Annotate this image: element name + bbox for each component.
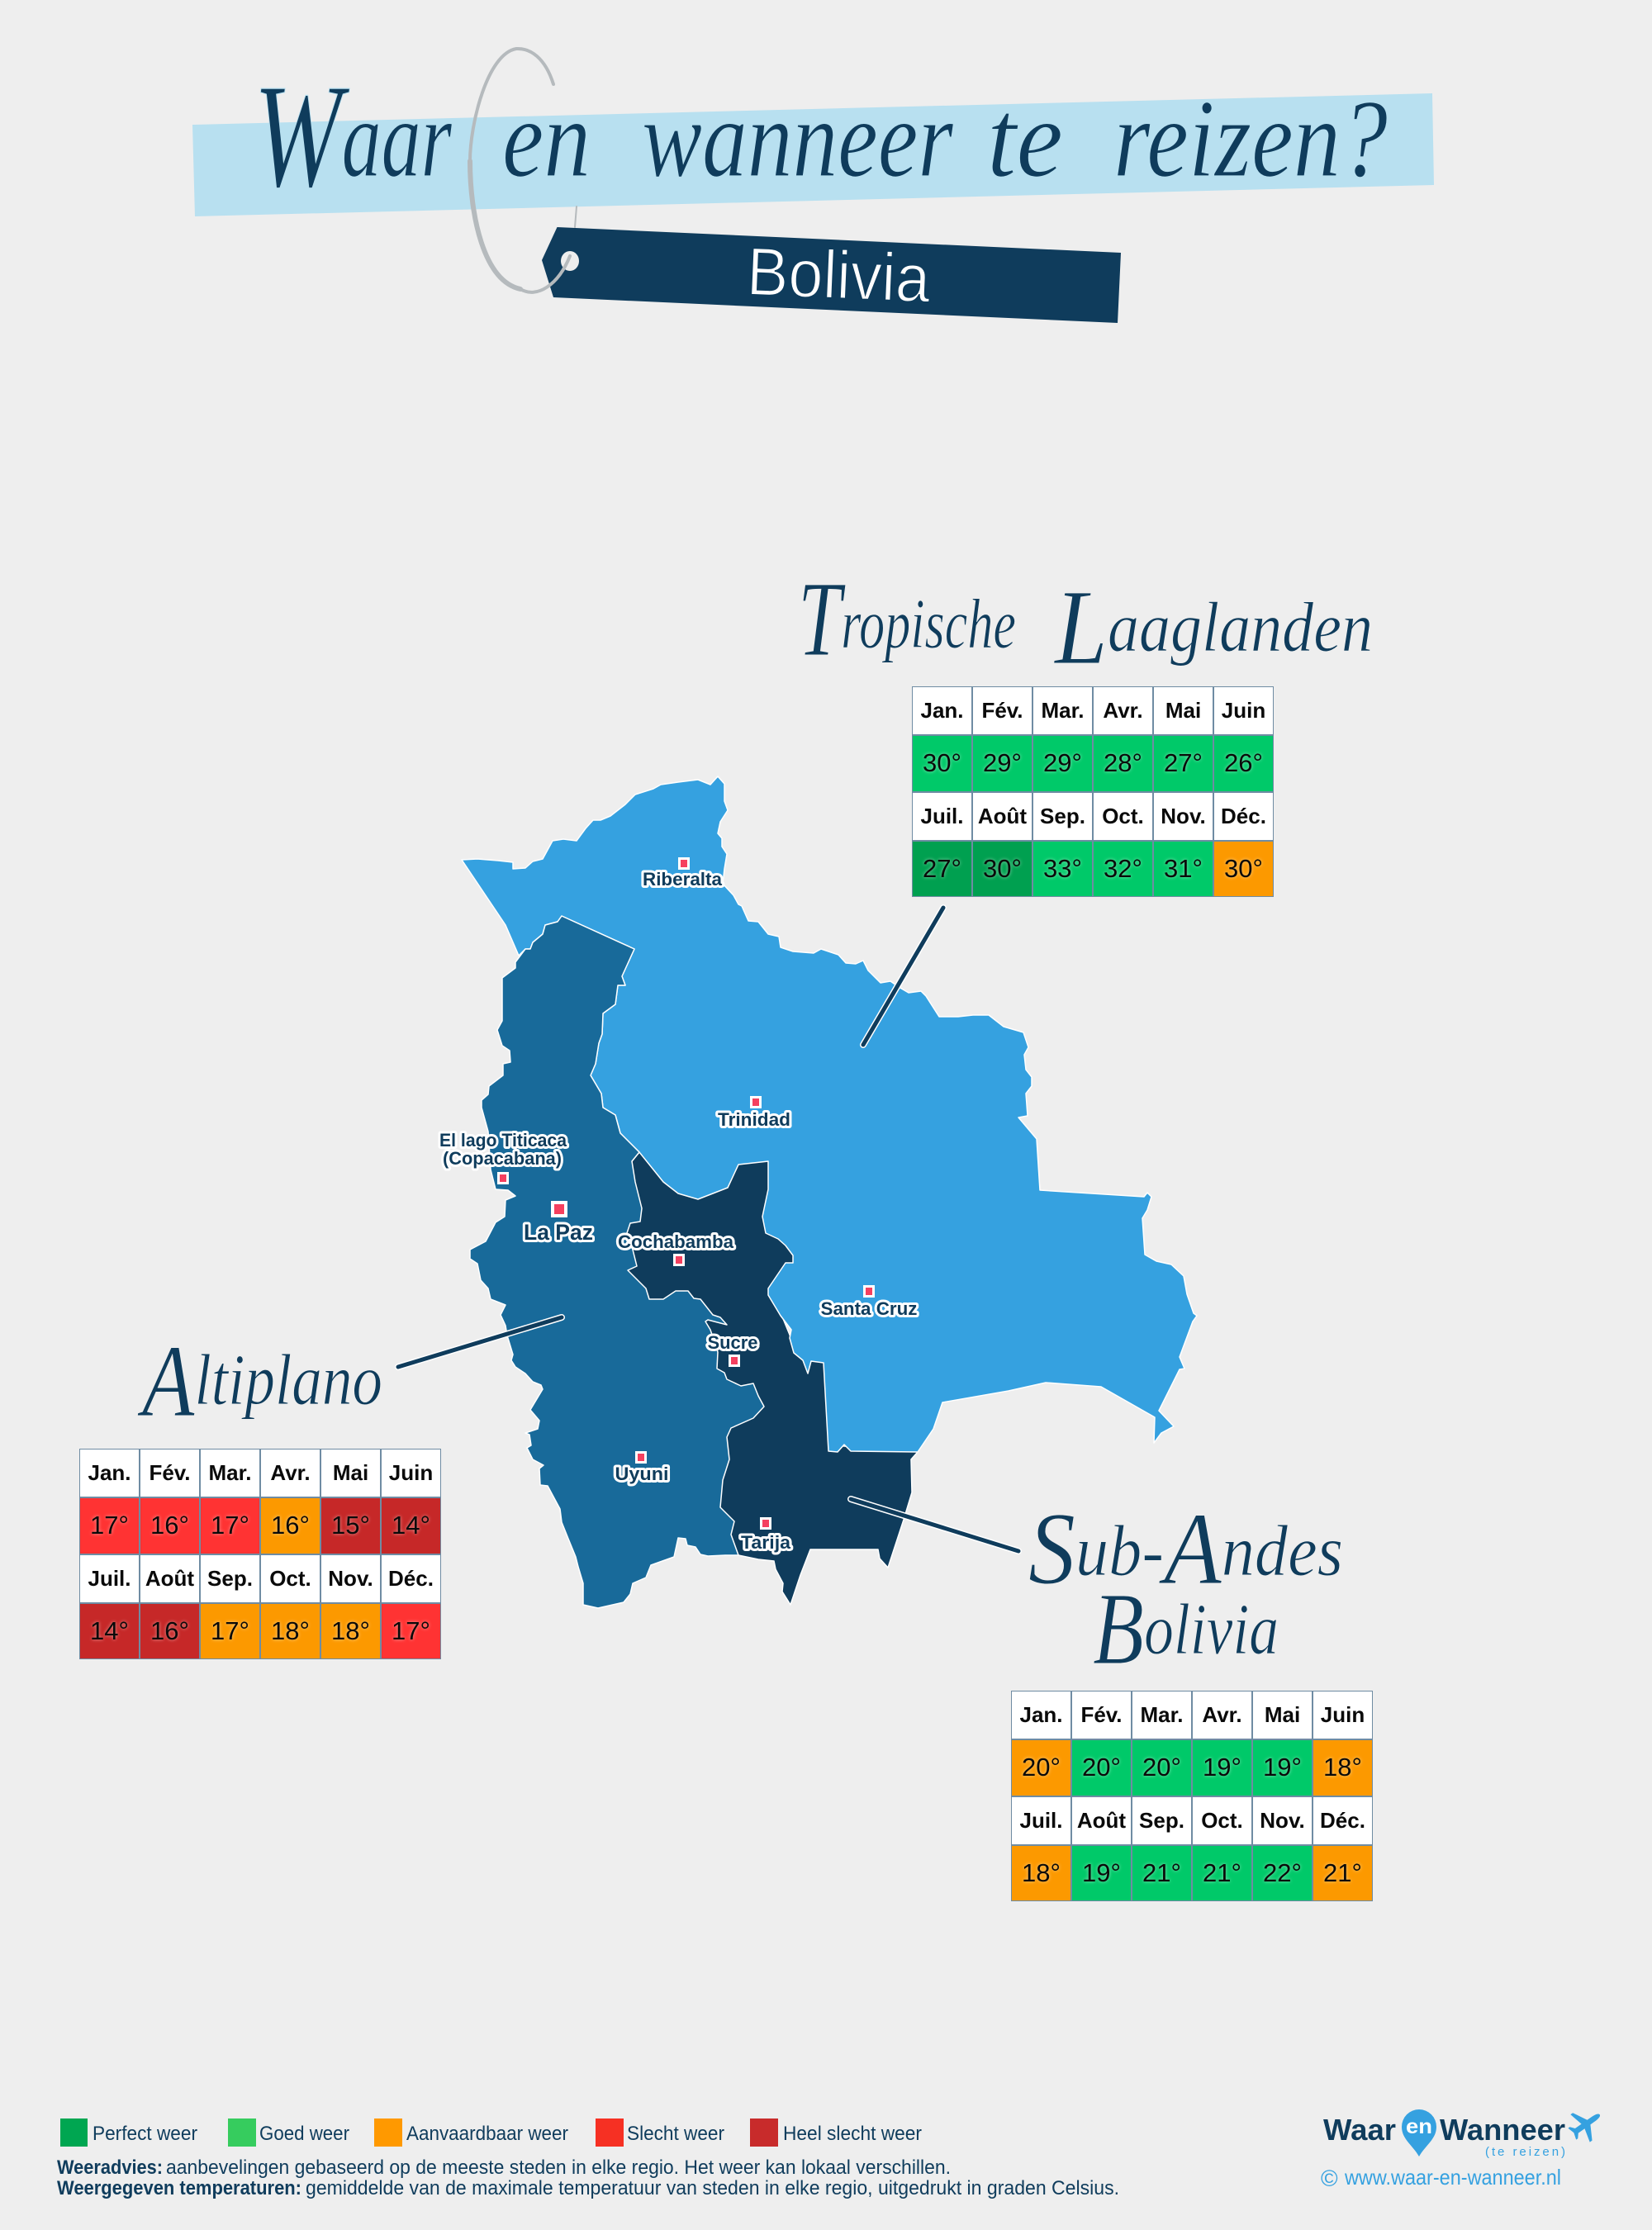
months row 1: Mai <box>1265 1702 1300 1727</box>
legend item: Heel slecht weer <box>750 2118 922 2147</box>
temperatures row 1 <box>79 1497 441 1554</box>
table: Sub-Andes Bolivia <box>1011 1691 1373 1901</box>
legend <box>60 2118 922 2147</box>
heading: Sub-Andes Bolivia: B <box>1093 1573 1144 1687</box>
icon: airplane <box>1563 2101 1609 2147</box>
temperatures row 1: 17° <box>90 1511 129 1540</box>
temperatures row 2 <box>79 1603 441 1659</box>
months row 1: Mai <box>1165 698 1201 723</box>
city: Riberalta <box>643 857 723 890</box>
temperatures row 1: 18° <box>1323 1753 1362 1782</box>
city: Tarija: Tarija <box>741 1532 791 1553</box>
city: Uyuni: Uyuni <box>615 1464 669 1484</box>
temperatures row 1: 19° <box>1203 1753 1241 1782</box>
title: W <box>254 54 350 218</box>
months row 2: Sep. <box>207 1566 253 1591</box>
temperatures row 2: 21° <box>1203 1858 1241 1887</box>
months row 1 <box>912 686 1274 735</box>
temperatures row 1: 15° <box>331 1511 370 1540</box>
title: reizen? <box>1113 78 1388 201</box>
months row 1: Fév. <box>149 1460 191 1485</box>
months row 2: Nov. <box>1161 803 1206 828</box>
months row 1: Jan. <box>1019 1702 1063 1727</box>
logo: (te reizen) <box>1485 2145 1565 2159</box>
connector: Sub-Andes <box>851 1499 1018 1551</box>
title: en <box>502 78 591 201</box>
months row 2: Juil. <box>920 803 963 828</box>
temperatures row 2: 31° <box>1164 854 1203 883</box>
months row 1: Mai <box>333 1460 368 1485</box>
temperatures row 2: 18° <box>331 1616 370 1645</box>
months row 1: Mar. <box>1140 1702 1184 1727</box>
region: Sub-Andes <box>624 1152 918 1605</box>
temperatures row 1 <box>1011 1739 1373 1796</box>
heading: Tropische Laaglanden: T <box>798 560 846 679</box>
table: Altiplano <box>79 1449 441 1659</box>
temperatures row 1: 20° <box>1142 1753 1181 1782</box>
heading: Sub-Andes Bolivia: ndes <box>1222 1511 1343 1592</box>
city: El lago Titicaca: (Copacabana) <box>443 1148 562 1169</box>
legend item: Perfect weer <box>60 2118 197 2147</box>
country tag <box>542 227 1121 323</box>
logo: Waar <box>1323 2113 1396 2147</box>
heading: Tropische Laaglanden: ropische <box>841 584 1016 663</box>
months row 2: Août <box>978 803 1027 828</box>
temperatures row 2: 18° <box>271 1616 310 1645</box>
note: weergegeven temperaturen: gemiddelde van de maximale temperatuur van steden in elke regio, uitgedrukt in graden Celsius. <box>306 2177 1119 2199</box>
map of Bolivia <box>462 776 1197 1608</box>
months row 2: Déc. <box>1221 803 1266 828</box>
months row 2: Oct. <box>1201 1807 1243 1832</box>
temperatures row 2 <box>912 841 1274 897</box>
temperatures row 1: 20° <box>1082 1753 1121 1782</box>
temperatures row 1: 17° <box>211 1511 249 1540</box>
city: Trinidad <box>718 1096 790 1130</box>
months row 2: Nov. <box>328 1566 373 1591</box>
temperatures row 1: 19° <box>1263 1753 1302 1782</box>
temperatures row 2: 30° <box>983 854 1022 883</box>
heading: Altiplano: ltiplano <box>194 1340 382 1421</box>
region: Altiplano <box>470 916 764 1608</box>
temperatures row 2: 19° <box>1082 1858 1121 1887</box>
months row 1: Avr. <box>1103 698 1143 723</box>
legend item: Heel slecht weer: Heel slecht weer <box>783 2123 922 2145</box>
temperatures row 2: 18° <box>1022 1858 1061 1887</box>
temperatures row 2: 22° <box>1263 1858 1302 1887</box>
icon: map pin: en <box>1406 2115 1432 2138</box>
temperatures row 1: 30° <box>923 748 961 777</box>
website link: www.waar-en-wanneer.nl <box>1344 2165 1561 2190</box>
temperatures row 1: 26° <box>1224 748 1263 777</box>
connector: Altiplano <box>398 1317 562 1367</box>
legend item: Slecht weer: Slecht weer <box>627 2123 724 2145</box>
temperatures row 1: 28° <box>1104 748 1142 777</box>
months row 2: Août <box>1077 1807 1126 1832</box>
table: Tropische Laaglanden <box>912 686 1274 897</box>
months row 1: Mar. <box>208 1460 252 1485</box>
city: Cochabamba: Cochabamba <box>618 1231 734 1252</box>
cities <box>439 857 917 1553</box>
months row 1: Jan. <box>920 698 964 723</box>
temperatures row 1: 27° <box>1164 748 1203 777</box>
temperatures row 1: 29° <box>1043 748 1082 777</box>
months row 2: Juil. <box>1019 1807 1062 1832</box>
city: Riberalta: Riberalta <box>643 869 723 890</box>
months row 2: Déc. <box>388 1566 434 1591</box>
months row 2 <box>912 792 1274 841</box>
months row 2 <box>1011 1796 1373 1845</box>
city: Sucre <box>707 1332 758 1367</box>
temperatures row 2: 21° <box>1142 1858 1181 1887</box>
temperatures row 2: 33° <box>1043 854 1082 883</box>
title <box>254 54 1388 218</box>
heading: Sub-Andes Bolivia <box>1028 1492 1343 1687</box>
months row 1: Juin <box>1321 1702 1365 1727</box>
temperatures row 2 <box>1011 1845 1373 1901</box>
legend item: Slecht weer <box>596 2118 724 2147</box>
heading: Sub-Andes Bolivia: A <box>1159 1492 1222 1606</box>
title: wanneer <box>642 78 953 201</box>
temperatures row 2: 21° <box>1323 1858 1362 1887</box>
note: weeradvies: Weeradvies: <box>57 2156 163 2179</box>
months row 2: Déc. <box>1320 1807 1365 1832</box>
legend item: Goed weer <box>228 2118 349 2147</box>
temperatures row 2: 14° <box>90 1616 129 1645</box>
title banner <box>192 93 1434 216</box>
months row 1: Fév. <box>1080 1702 1123 1727</box>
city: Cochabamba <box>618 1231 734 1266</box>
title: te <box>987 78 1063 201</box>
months row 1: Mar. <box>1041 698 1085 723</box>
legend item: Goed weer: Goed weer <box>259 2123 349 2145</box>
website link: © <box>1321 2166 1338 2191</box>
legend item: Aanvaardbaar weer <box>374 2118 568 2147</box>
months row 2: Sep. <box>1139 1807 1184 1832</box>
city: El lago Titicaca: El lago Titicaca <box>439 1130 567 1151</box>
temperatures row 2: 17° <box>392 1616 430 1645</box>
heading: Tropische Laaglanden <box>798 560 1373 687</box>
temperatures row 2: 16° <box>150 1616 189 1645</box>
temperatures row 1: 20° <box>1022 1753 1061 1782</box>
tag string <box>470 49 577 292</box>
connector: Tropische Laaglanden <box>863 908 943 1045</box>
city: Santa Cruz: Santa Cruz <box>821 1298 917 1319</box>
city: La Paz: La Paz <box>524 1220 593 1245</box>
months row 2: Nov. <box>1260 1807 1305 1832</box>
temperatures row 2: 32° <box>1104 854 1142 883</box>
city: Trinidad: Trinidad <box>718 1109 790 1130</box>
months row 1: Avr. <box>1202 1702 1242 1727</box>
legend item: Aanvaardbaar weer: Aanvaardbaar weer <box>406 2123 568 2145</box>
temperatures row 2: 17° <box>211 1616 249 1645</box>
icon: map pin <box>1402 2109 1436 2156</box>
temperatures row 2: 30° <box>1224 854 1263 883</box>
heading: Altiplano: A <box>137 1325 195 1439</box>
months row 1: Jan. <box>88 1460 131 1485</box>
logo: Wanneer <box>1440 2113 1565 2147</box>
months row 1: Avr. <box>270 1460 311 1485</box>
temperatures row 1: 29° <box>983 748 1022 777</box>
months row 2: Juil. <box>88 1566 131 1591</box>
temperatures row 2: 27° <box>923 854 961 883</box>
months row 2 <box>79 1554 441 1603</box>
temperatures row 1: 14° <box>392 1511 430 1540</box>
months row 2: Sep. <box>1040 803 1085 828</box>
months row 2: Oct. <box>269 1566 311 1591</box>
city: Tarija <box>741 1517 791 1553</box>
temperatures row 1: 16° <box>271 1511 310 1540</box>
title: aar <box>342 78 452 201</box>
city: Sucre: Sucre <box>707 1332 758 1353</box>
heading: Tropische Laaglanden: aaglanden <box>1108 587 1373 667</box>
heading: Sub-Andes Bolivia: ub- <box>1075 1511 1164 1592</box>
city: Uyuni <box>615 1451 669 1484</box>
months row 1: Juin <box>1222 698 1265 723</box>
city: El lago Titicaca <box>439 1130 567 1184</box>
months row 1: Fév. <box>981 698 1023 723</box>
months row 2: Oct. <box>1102 803 1144 828</box>
city: Santa Cruz <box>821 1285 917 1319</box>
months row 1: Juin <box>389 1460 433 1485</box>
months row 1 <box>79 1449 441 1497</box>
heading: Tropische Laaglanden: L <box>1053 568 1108 687</box>
logo <box>1323 2101 1609 2159</box>
heading: Sub-Andes Bolivia: S <box>1028 1492 1075 1606</box>
city: La Paz <box>524 1201 593 1245</box>
region: Tropische Laaglanden <box>462 776 1197 1452</box>
country tag: Bolivia <box>745 234 932 317</box>
legend item: Perfect weer: Perfect weer <box>93 2123 197 2145</box>
note: weeradvies: aanbevelingen gebaseerd op de meeste steden in elke regio. Het weer kan lokaal verschillen. <box>166 2156 951 2179</box>
months row 2: Août <box>145 1566 194 1591</box>
temperatures row 1 <box>912 735 1274 792</box>
temperatures row 1: 16° <box>150 1511 189 1540</box>
note: weergegeven temperaturen: Weergegeven temperaturen: <box>57 2177 301 2199</box>
months row 1 <box>1011 1691 1373 1739</box>
heading: Sub-Andes Bolivia: olivia <box>1144 1590 1279 1670</box>
